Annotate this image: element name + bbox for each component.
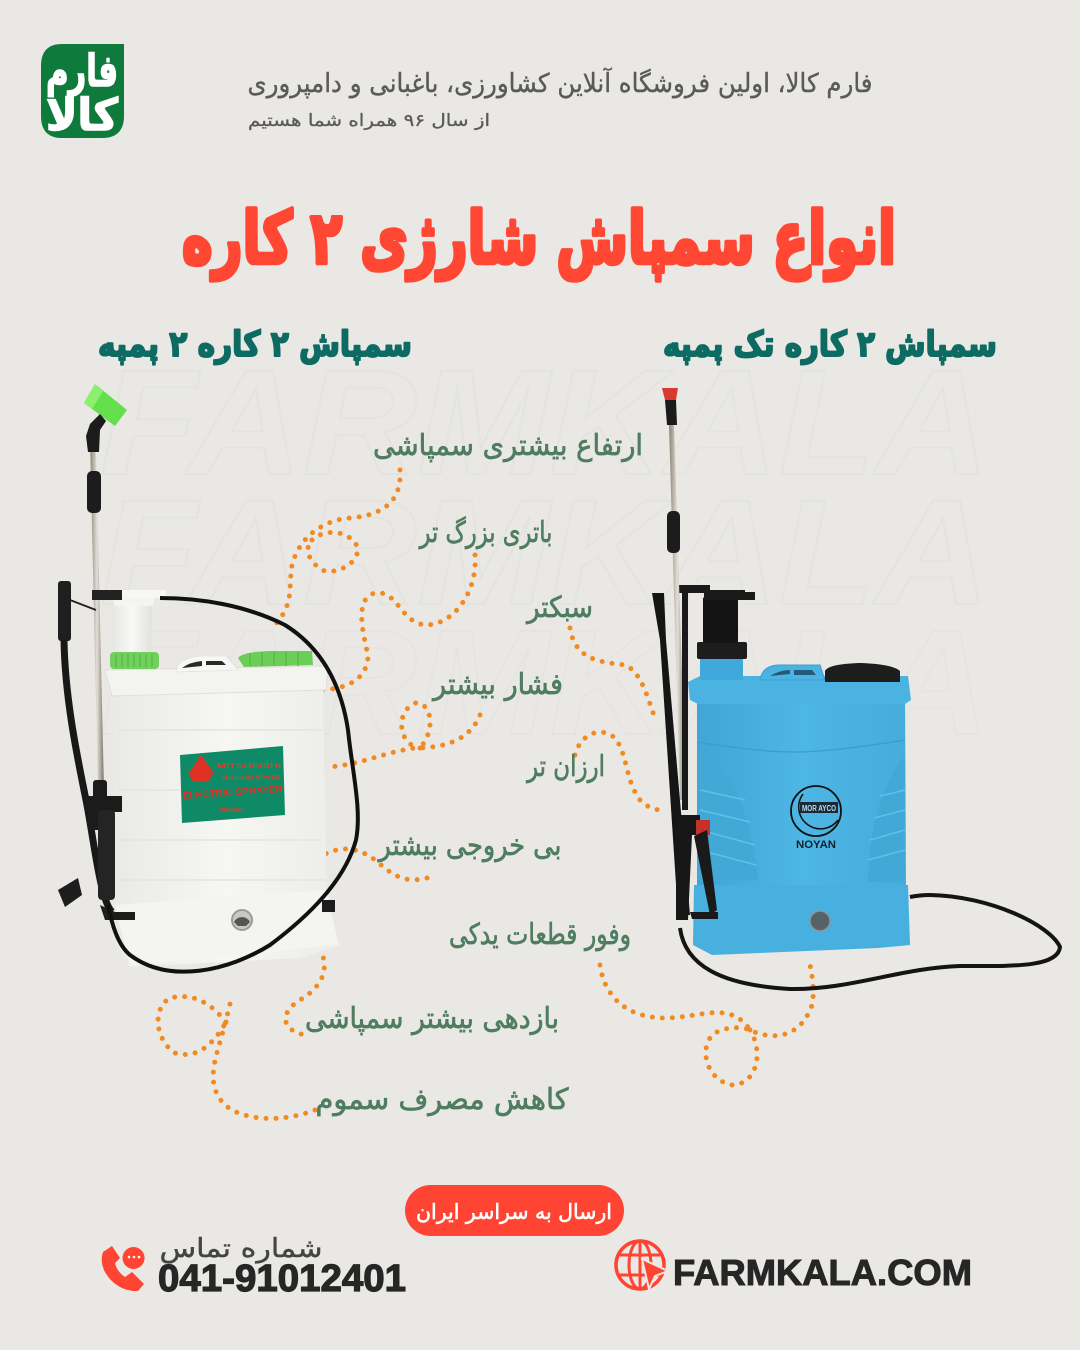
pump cylinder [112,603,152,655]
heading: single-pump sprayer: سمپاش ۲ کاره تک پمپه [663,325,997,365]
feature labels: باتری بزرگ تر [418,515,552,549]
black collar and cylinder [697,642,747,659]
icon: globe with cursor [616,1241,668,1289]
lance rod [90,440,104,790]
feature labels: ارتفاع بیشتری سمپاشی [373,428,643,463]
pill: nationwide shipping: ارسال به سراسر ایران [416,1200,612,1224]
dotted connectors [158,470,813,1118]
feature labels: سبکتر [525,590,593,624]
contact label: شماره تماس [160,1234,322,1264]
feature labels: فشار بیشتر [431,667,563,701]
carry handle [760,665,825,680]
carry handle [176,656,238,672]
watermark: FARMKALA [100,338,990,766]
hose [108,598,358,972]
sprayer: white two-pump: MITSUBISHI [217,763,281,770]
header tagline: فارم کالا، اولین فروشگاه آنلاین کشاورزی، باغبانی و دامپروری [248,67,872,99]
hose [680,895,1060,989]
logo: Morayco Noyan: NOYAN [796,839,836,851]
heading: two-pump sprayer: سمپاش ۲ کاره ۲ پمپه [98,325,412,365]
feature labels: وفور قطعات یدکی [449,917,631,951]
icon: phone [102,1246,145,1291]
gauge [810,911,830,931]
logo: Morayco Noyan [791,786,841,851]
nozzle head [84,384,127,426]
feature labels: ارزان تر [525,749,605,783]
black cap [825,663,900,682]
website: FARMKALA.COM [673,1252,972,1293]
sprayer: white two-pump: ELECTRIC SPRAYER [182,784,284,802]
phone number: 041-91012401 [158,1258,406,1300]
handle tube [58,581,71,641]
feature labels: بی خروجی بیشتر [377,828,562,862]
logo: Farmkala: کالا [46,90,118,141]
sprayer: white two-pump: ORIGINAL [220,808,244,814]
header tagline: از سال ۹۶ همراه شما هستیم [248,111,490,131]
sprayer: white two-pump: THAILAND STYLER [222,776,281,782]
pill: nationwide shipping [405,1185,624,1236]
watermark: FARMKALA: FARMKALA [100,598,990,766]
lance rod [669,425,686,800]
watermark: FARMKALA: FARMKALA [100,468,990,636]
tank body [110,668,340,967]
green caps [110,652,159,669]
trigger [84,796,122,830]
logo: Farmkala: فارم [46,46,118,97]
sprayer: white two-pump [58,384,358,972]
neck [700,655,743,680]
label [180,746,285,823]
sprayer: blue single-pump [652,388,1060,989]
feature labels [305,428,643,1116]
logo: Morayco Noyan: MOR AYCO [802,804,836,813]
watermark: FARMKALA: FARMKALA [100,338,990,506]
header tagline [248,67,872,131]
feature labels: بازدهی بیشتر سمپاشی [305,1001,559,1036]
tank body [697,695,906,885]
nozzle [662,388,678,400]
handle tubes [652,593,690,915]
logo: Farmkala [41,44,124,141]
feature labels: کاهش مصرف سموم [316,1082,569,1116]
gauge [232,910,252,930]
